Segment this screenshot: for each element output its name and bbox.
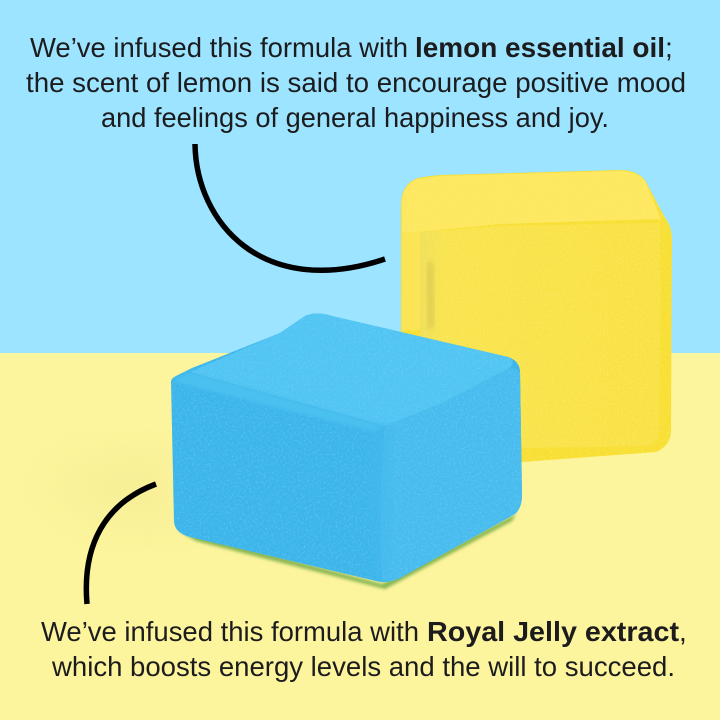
top callout text: lemon essential oil — [415, 32, 665, 63]
top callout text: and feelings of general happiness and joy. — [101, 102, 609, 133]
background: yellow floor — [0, 353, 720, 720]
yellow cube top face — [402, 171, 661, 232]
blue cube right face — [381, 368, 522, 582]
bottom callout text: which boosts energy levels and the will to succeed. — [51, 651, 675, 682]
soft floor shadow — [40, 440, 180, 540]
bottom callout text — [41, 616, 687, 682]
yellow bath bomb — [401, 170, 672, 462]
blue bath bomb — [171, 314, 522, 582]
curved leader line: bottom callout to blue cube — [86, 484, 156, 604]
blue cube rim highlight — [172, 372, 385, 432]
blue cube top face — [190, 314, 513, 426]
bottom callout text: We’ve infused this formula with — [41, 616, 419, 647]
blue cube silhouette — [171, 314, 522, 582]
bottom callout text: Royal Jelly extract — [427, 616, 679, 647]
top callout text: We’ve infused this formula with — [30, 32, 408, 63]
yellow cube front face — [420, 223, 660, 448]
top callout text: ; — [665, 32, 673, 63]
top callout text: the scent of lemon is said to encourage positive mood — [26, 67, 686, 98]
blue cube corner highlight — [368, 424, 392, 576]
top callout text — [26, 32, 686, 133]
yellow cube left shading — [427, 262, 434, 328]
yellow cube body — [401, 170, 672, 462]
bottom callout text: , — [679, 616, 687, 647]
background: blue wall — [0, 0, 720, 354]
green shadow under blue cube — [178, 514, 516, 589]
yellow cube left strip — [402, 232, 422, 330]
curved leader line: top callout to yellow cube — [195, 144, 385, 270]
